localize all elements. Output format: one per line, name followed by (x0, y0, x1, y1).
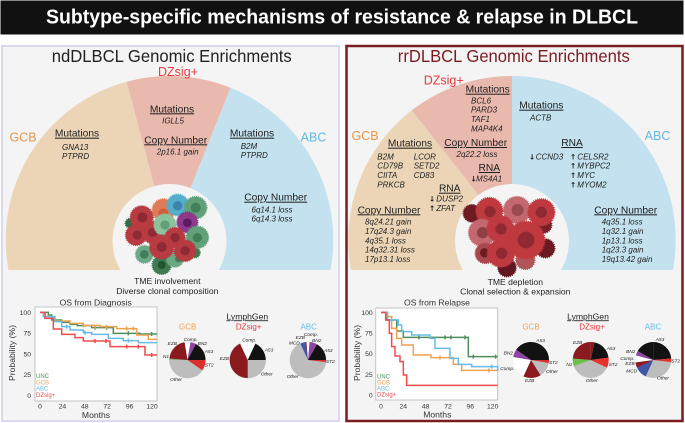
ABC mutations: Mutations (230, 129, 274, 140)
pie: GCB: BN2 (198, 341, 207, 347)
wedge: GCB (6, 82, 169, 270)
chart: OS from Relapse: 24 (400, 403, 407, 410)
DZsig+ copy number: Copy Number (144, 135, 208, 146)
chart: OS from Diagnosis: 25 (23, 372, 31, 379)
ABC RNA: MYBPC2 (577, 162, 611, 171)
panel: rrDLBCL (346, 46, 682, 421)
pie: DZsig+ (220, 322, 274, 378)
GCB copy number: 17p13.1 loss (365, 255, 410, 264)
pie: ABC: EZB (296, 335, 306, 341)
DZsig+ mutations: MAP4K4 (471, 124, 503, 133)
pie: GCB (163, 322, 214, 383)
GCB mutations: GNA13 (62, 143, 89, 152)
GCB mutations: Mutations (388, 139, 432, 150)
chart: OS from Relapse: Probability (%) (352, 325, 362, 381)
pie: ABC: EZB (625, 361, 635, 367)
pie: GCB: GCB (522, 323, 540, 332)
pie: ABC: Comp. (304, 332, 318, 338)
DZsig+ mutations: TAF1 (471, 115, 490, 124)
chart: OS from Diagnosis: 24 (59, 403, 66, 410)
ABC copy number: 1q32.1 gain (602, 227, 644, 236)
ABC copy number: 4q35.1 loss (602, 218, 643, 227)
pie: GCB: GCB (179, 322, 196, 331)
pie: DZsig+: A53 (606, 346, 616, 352)
chart: OS from Diagnosis: UNC (36, 374, 50, 380)
caption: TME involvement: Diverse clonal composition (116, 286, 219, 296)
chart: OS from Diagnosis: 48 (81, 403, 89, 410)
pie: GCB: N1 (163, 354, 169, 360)
GCB mutations: B2M (377, 152, 394, 161)
ABC mutations: PTPRD (241, 151, 268, 160)
label: DZsig+: DZsig+ (424, 73, 464, 87)
DZsig+ mutations: IGLL5 (162, 116, 184, 125)
chart: OS from Relapse: 100 (361, 310, 373, 317)
DZsig+ mutations (150, 104, 194, 125)
pie: GCB: ST2 (549, 360, 558, 366)
ABC copy number: 1p13.1 loss (602, 236, 643, 245)
pie: DZsig+: Other (261, 372, 273, 378)
chart: OS from Diagnosis: 0 (27, 393, 31, 400)
chart: OS from Diagnosis: ABC (36, 387, 49, 393)
ABC copy number: 19q13.42 gain (602, 255, 653, 264)
GCB mutations: SETD2 (414, 162, 440, 171)
wedge: ABC (512, 76, 676, 270)
GCB mutations: CD79B (377, 162, 404, 171)
DZsig+ copy number (444, 138, 508, 159)
GCB copy number: 14q32.31 loss (365, 246, 415, 255)
chart: OS from Relapse: 120 (487, 403, 499, 410)
title banner: Subtype-specific mechanisms of resistance & relapse in DLBCL (46, 6, 638, 28)
pie: ABC (620, 323, 680, 382)
ABC copy number: Copy Number (594, 205, 658, 216)
pie: GCB: Other (170, 377, 182, 383)
chart: OS from Diagnosis: 75 (23, 331, 31, 338)
chart: OS from Diagnosis: 96 (126, 403, 134, 410)
chart: OS from Relapse: 25 (365, 372, 373, 379)
pie: DZsig+: EZB (220, 356, 230, 362)
wedge: DZsig+ (127, 76, 230, 240)
GCB mutations (55, 129, 99, 161)
chart: OS from Diagnosis: DZsig+ (36, 393, 56, 399)
chart: OS from Diagnosis: 120 (146, 403, 158, 410)
GCB copy number: 4q35.1 loss (365, 236, 406, 245)
DZsig+ mutations: Mutations (150, 104, 194, 115)
GCB mutations: LCOR (414, 152, 436, 161)
panel: ndDLBCL (2, 46, 339, 421)
panel heading: rrDLBCL Genomic Enrichments: rrDLBCL Genomic Enrichments (398, 46, 630, 66)
chart: OS from Diagnosis: 72 (103, 403, 111, 410)
ABC RNA: CCND3 (536, 152, 564, 161)
centre hole (455, 184, 569, 298)
DZsig+ copy number: 2q22.2 loss (456, 150, 497, 159)
GCB mutations: CIITA (377, 171, 397, 180)
ABC copy number: 1q23.3 gain (602, 246, 644, 255)
pie: GCB: EZB (168, 341, 178, 347)
pie: ABC: Other (657, 376, 669, 382)
label: GCB: GCB (9, 131, 37, 145)
chart: OS from Relapse (352, 298, 499, 420)
ABC copy number: 6q14.1 loss (252, 205, 292, 214)
heading: LymphGen: LymphGen (567, 311, 609, 321)
label: ABC: ABC (645, 129, 670, 143)
pie: DZsig+: EZB (573, 340, 583, 346)
pie: GCB: BN2 (504, 350, 513, 356)
GCB mutations: PTPRD (62, 152, 89, 161)
GCB mutations: Mutations (55, 129, 99, 140)
ABC copy number: 6q14.3 loss (252, 215, 292, 224)
pie: DZsig+: N1 (566, 362, 573, 368)
chart: OS from Relapse: Months (423, 410, 451, 420)
ABC mutations: ACTB (529, 114, 552, 123)
pie: ABC: ABC (645, 323, 661, 332)
GCB RNA: DUSP2 (436, 195, 464, 204)
ABC RNA: MYOM2 (577, 180, 607, 189)
GCB RNA: ↑ (429, 204, 435, 213)
pie: GCB: Comp. (184, 337, 198, 343)
ABC RNA: ↑ (570, 180, 576, 189)
GCB mutations: PRKCB (377, 180, 406, 189)
ABC mutations (519, 101, 563, 123)
DZsig+ RNA: RNA (479, 163, 500, 174)
GCB RNA: ZFAT (435, 204, 456, 213)
pie: DZsig+: Other (586, 378, 598, 384)
GCB mutations (377, 139, 440, 189)
ABC RNA: ↑ (570, 152, 576, 161)
chart: OS from Diagnosis: 100 (20, 310, 31, 317)
pie: DZsig+: A53 (264, 348, 274, 354)
caption: TME involvement: TME involvement (134, 276, 201, 286)
pie: GCB: A53 (204, 349, 214, 355)
ABC RNA: CELSR2 (577, 152, 609, 161)
DZsig+ mutations: Mutations (466, 85, 510, 96)
DZsig+ copy number (144, 135, 208, 156)
chart: OS from Relapse: 75 (365, 330, 373, 338)
GCB copy number (358, 205, 421, 264)
pie: ABC: BN2 (312, 338, 322, 344)
chart: OS from Diagnosis: OS from Diagnosis (60, 298, 132, 308)
wedge: GCB (348, 110, 512, 270)
chart: OS from Relapse: 72 (444, 403, 452, 410)
ABC RNA: ↓ (529, 152, 535, 161)
pie: GCB: EZB (525, 378, 535, 384)
chart: OS from Relapse: DZsig+ (377, 392, 397, 398)
DZsig+ mutations (466, 85, 510, 133)
ABC RNA: ↑ (570, 171, 576, 180)
ABC RNA (529, 138, 611, 189)
wedge: ABC (170, 88, 333, 270)
DZsig+ copy number: Copy Number (444, 138, 508, 149)
pie: ABC: MCD (626, 368, 638, 374)
chart: OS from Relapse: 0 (369, 392, 373, 400)
pie: ABC: Comp. (620, 356, 634, 362)
chart: OS from Relapse: OS from Relapse (404, 298, 470, 308)
ABC copy number: Copy Number (244, 193, 308, 204)
icon: diverse cell cluster (125, 194, 208, 274)
ABC RNA: ↑ (570, 162, 576, 171)
icon: clonal red cell cluster (463, 197, 555, 277)
DZsig+ mutations: PARD3 (471, 106, 498, 115)
GCB RNA: ↓ (429, 195, 435, 204)
label: GCB: GCB (351, 129, 379, 143)
ABC mutations (230, 129, 274, 160)
DZsig+ copy number: 2p16.1 gain (156, 147, 199, 156)
chart: OS from Relapse: UNC (377, 374, 391, 380)
chart: OS from Relapse: 50 (365, 351, 373, 358)
pie: DZsig+: Comp. (242, 338, 256, 344)
chart: OS from Diagnosis: Probability (%) (7, 325, 17, 381)
GCB copy number: 8q24.21 gain (365, 218, 412, 227)
pie: DZsig+: ST2 (609, 362, 618, 368)
ABC mutations: Mutations (519, 101, 563, 112)
caption: TME depletion: TME depletion (488, 277, 543, 287)
GCB mutations: CD83 (414, 171, 435, 180)
DZsig+ RNA (470, 163, 502, 183)
ABC mutations: B2M (241, 142, 257, 151)
ABC copy number (244, 193, 308, 224)
label: DZsig+: DZsig+ (158, 65, 198, 79)
pie: DZsig+: DZsig+ (579, 323, 605, 332)
chart: OS from Diagnosis: 50 (23, 351, 31, 358)
pie: DZsig+ (566, 323, 618, 384)
heading: LymphGen: LymphGen (226, 311, 268, 321)
ABC copy number (594, 205, 658, 264)
GCB RNA: RNA (439, 184, 461, 195)
chart: OS from Diagnosis (7, 298, 158, 420)
chart: OS from Diagnosis: Months (82, 410, 110, 420)
caption: TME depletion: Clonal selection & expansion (460, 286, 571, 296)
caption: TME involvement (116, 276, 219, 296)
GCB RNA (429, 184, 464, 213)
title banner (0, 0, 684, 34)
pie: ABC (287, 322, 335, 380)
chart: OS from Diagnosis: 0 (38, 403, 42, 410)
DZsig+ mutations: BCL6 (471, 96, 492, 105)
pie: DZsig+: DZsig+ (236, 322, 262, 331)
GCB copy number: Copy Number (358, 205, 421, 216)
wedge: DZsig+ (412, 76, 512, 240)
pie: ABC: ST2 (671, 358, 680, 364)
DZsig+ RNA: ↓ (470, 174, 477, 183)
pie: GCB (500, 323, 558, 384)
pie: GCB: ST2 (205, 362, 214, 368)
chart: OS from Relapse: 48 (422, 403, 430, 410)
pie: ABC: ST2 (326, 359, 335, 365)
pie: GCB: A53 (535, 338, 545, 344)
pie: ABC: A53 (655, 337, 665, 343)
ABC RNA: RNA (561, 138, 583, 149)
pie: ABC: Other (287, 374, 299, 380)
chart: OS from Relapse: 0 (379, 403, 383, 410)
chart: OS from Relapse: ABC (377, 386, 390, 392)
GCB copy number: 17q24.3 gain (365, 227, 412, 236)
caption: TME depletion (460, 277, 571, 296)
pie: GCB: Other (546, 369, 558, 375)
label: ABC: ABC (301, 131, 326, 145)
pie: GCB: Comp. (500, 366, 514, 372)
ABC RNA: MYC (577, 171, 595, 180)
pie: ABC: ABC (300, 322, 317, 331)
panel heading: ndDLBCL Genomic Enrichments: ndDLBCL Genomic Enrichments (52, 46, 292, 66)
chart: OS from Relapse: GCB (377, 380, 390, 386)
pie: ABC: A53 (323, 348, 333, 354)
DZsig+ RNA: MS4A1 (476, 174, 502, 183)
chart: OS from Relapse: 96 (467, 403, 474, 410)
centre hole (112, 184, 226, 298)
chart: OS from Diagnosis: GCB (36, 380, 49, 386)
pie: ABC: BN2 (626, 349, 636, 355)
pie: ABC: MCD (289, 340, 300, 346)
